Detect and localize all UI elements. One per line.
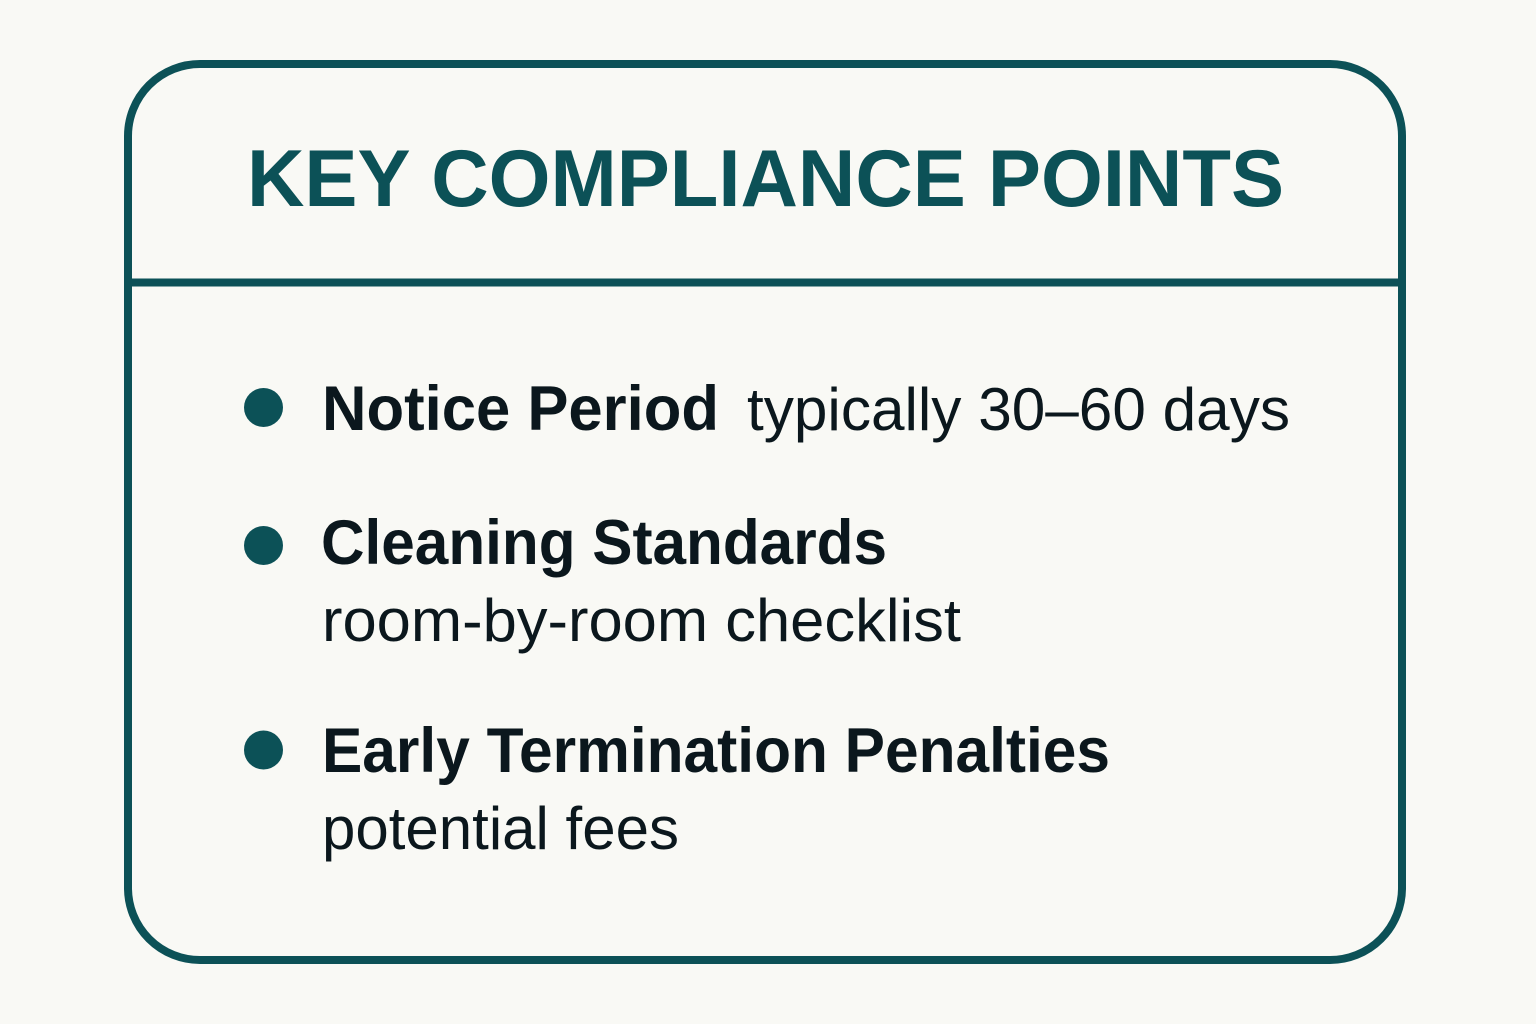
label: cleaning standards: Cleaning Standards	[321, 508, 887, 578]
detail: early termination penalties: potential fees	[322, 795, 679, 862]
item: cleaning standards	[244, 508, 961, 654]
label: early termination penalties: Early Termination Penalties	[322, 716, 1110, 786]
title: KEY COMPLIANCE POINTS	[247, 134, 1284, 224]
detail: cleaning standards: room-by-room checklist	[322, 587, 961, 654]
item: early termination penalties	[244, 716, 1110, 862]
detail: notice period: typically 30–60 days	[747, 376, 1290, 443]
bullet	[244, 526, 283, 565]
panel: card border	[128, 64, 1402, 960]
item: notice period	[244, 374, 1290, 444]
label: notice period: Notice Period	[322, 374, 719, 444]
bullet	[244, 730, 283, 770]
bullet	[244, 388, 283, 427]
